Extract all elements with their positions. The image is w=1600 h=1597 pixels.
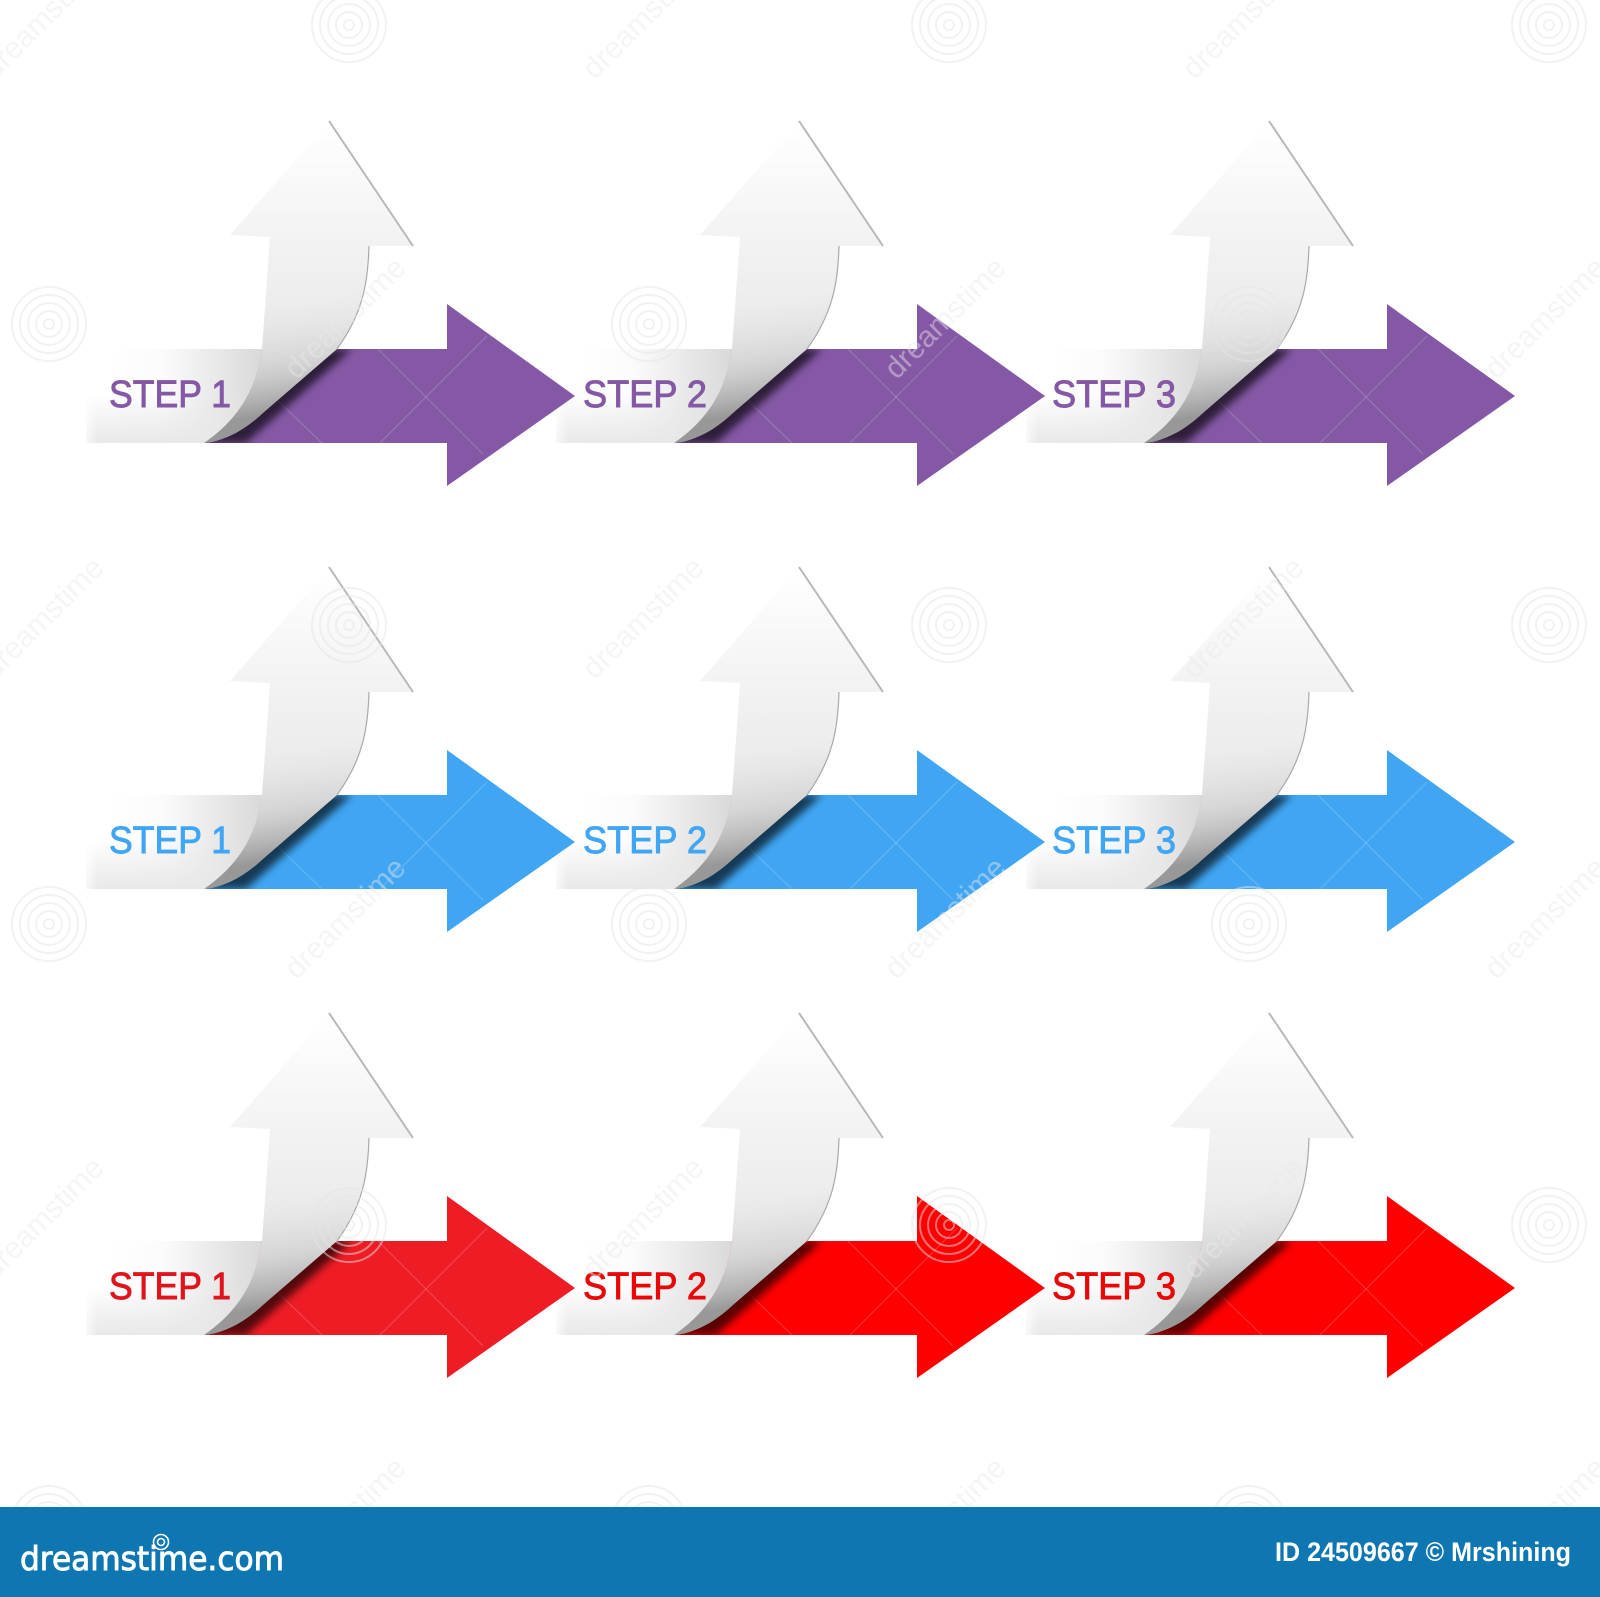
step 2 blue	[556, 567, 1045, 932]
step 1 red	[86, 1013, 575, 1378]
icon: logo spiral	[154, 1534, 168, 1550]
row 2: blue steps	[86, 567, 1515, 932]
watermark text: dreamstime	[878, 1451, 1012, 1585]
step 3 purple: STEP 3	[1052, 374, 1176, 416]
step 2 red	[556, 1013, 1045, 1378]
step 3 red	[1026, 1013, 1515, 1378]
step 3 red: STEP 3	[1052, 1266, 1176, 1308]
watermark text: dreamstime	[278, 851, 412, 985]
step 1 purple: STEP 1	[109, 374, 231, 416]
step 1 purple	[86, 121, 575, 486]
watermark text: dreamstime	[1176, 551, 1310, 685]
row 3: red steps	[86, 1013, 1515, 1378]
watermark text: dreamstime	[576, 1151, 710, 1285]
step 2 purple	[556, 121, 1045, 486]
footer bar	[0, 1507, 1600, 1597]
step 3 blue	[1026, 567, 1515, 932]
step 2 red: STEP 2	[583, 1266, 707, 1308]
watermark text: dreamstime	[278, 251, 412, 385]
watermark text: dreamstime	[278, 1451, 412, 1585]
footer logo: dreamstime.com	[20, 1539, 284, 1578]
step 2 blue: STEP 2	[583, 820, 707, 862]
row 1: purple steps	[86, 121, 1515, 486]
watermark text: dreamstime	[1176, 1151, 1310, 1285]
step 1 red: STEP 1	[109, 1266, 231, 1308]
watermark text: dreamstime	[576, 551, 710, 685]
step 3 purple	[1026, 121, 1515, 486]
step 2 purple: STEP 2	[583, 374, 707, 416]
watermark text: dreamstime	[878, 851, 1012, 985]
step 1 blue	[86, 567, 575, 932]
footer credit: ID 24509667 © Mrshining	[1275, 1537, 1571, 1567]
step 3 blue: STEP 3	[1052, 820, 1176, 862]
watermark text: dreamstime	[878, 251, 1012, 385]
step 1 blue: STEP 1	[109, 820, 231, 862]
